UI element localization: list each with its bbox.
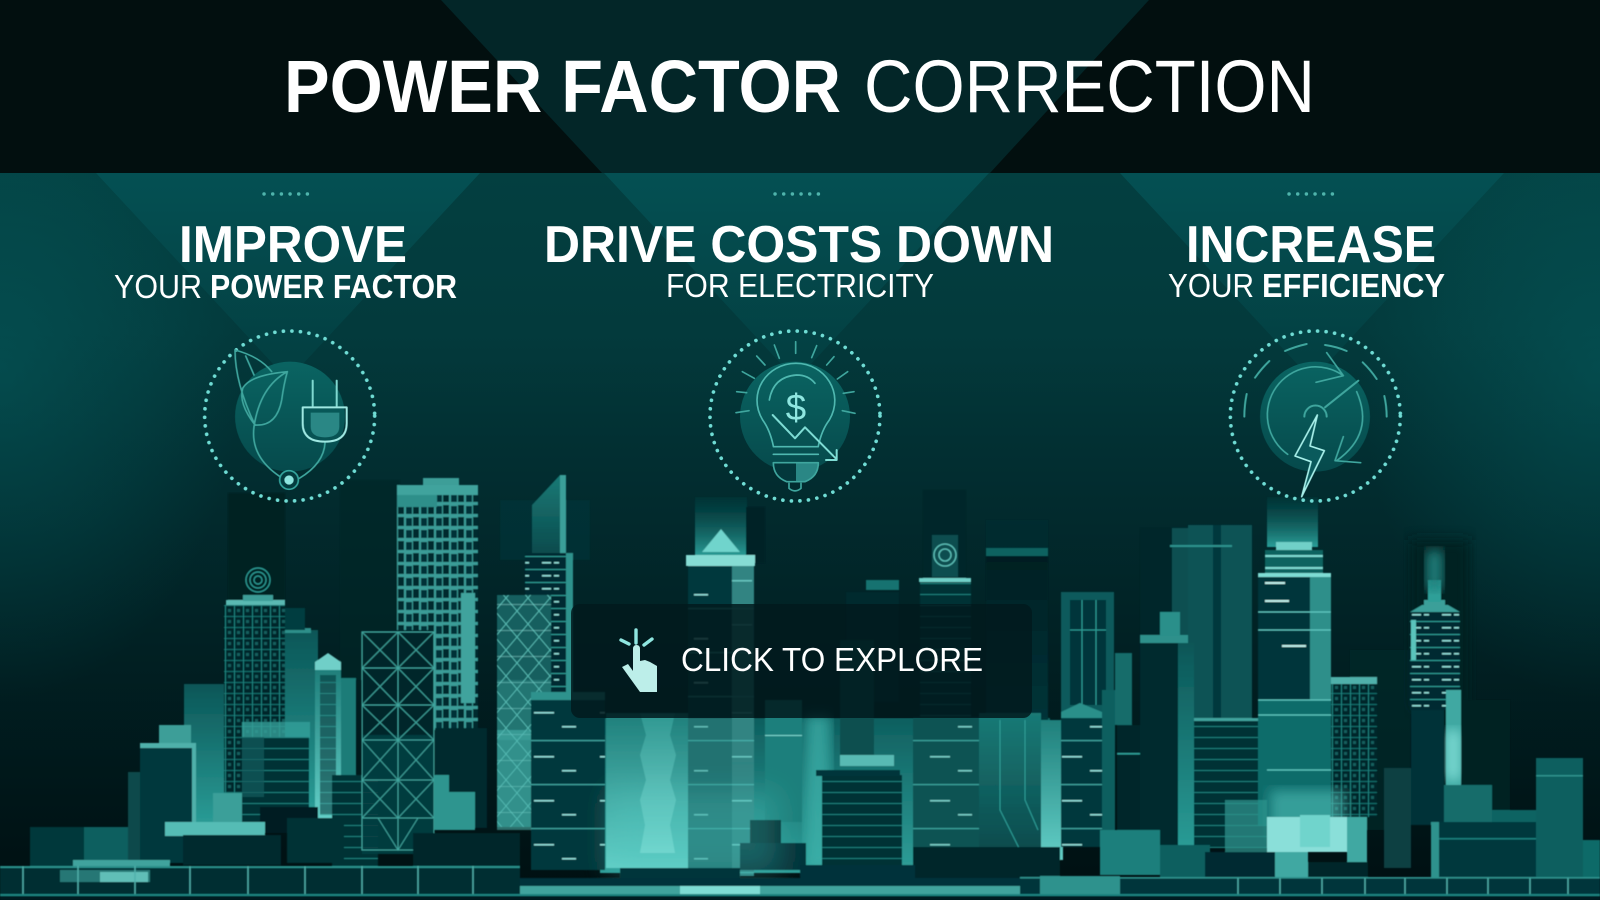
skyline (0, 475, 1600, 900)
dollar sign: $ (786, 387, 806, 428)
rays (736, 342, 855, 413)
skyline: left district (30, 568, 378, 867)
back leaf (235, 350, 272, 425)
column 2 heading: FOR ELECTRICITY (666, 267, 934, 304)
title: CORRECTION (864, 45, 1315, 128)
skyline: tall right tower (1225, 497, 1377, 877)
rotation arrows (1267, 353, 1363, 463)
front leaf (242, 372, 287, 427)
button label: CLICK TO EXPLORE (681, 641, 983, 678)
column 1 heading: POWER FACTOR (210, 268, 457, 305)
central tower glow (695, 497, 747, 557)
skyline: foreground dark blocks and rail (0, 845, 1600, 900)
cord (254, 427, 325, 478)
skyline: bottom glow (610, 790, 780, 875)
column 3 heading: EFFICIENCY (1262, 267, 1445, 304)
down arrow (773, 415, 837, 460)
column 3 heading: INCREASE (1186, 216, 1436, 274)
connector node (280, 471, 298, 489)
crown emblem (246, 568, 270, 592)
bulb base (773, 463, 818, 491)
skyline: crown tower (913, 490, 1063, 860)
skyline: central district (531, 497, 902, 876)
icon: leaf and plug (205, 331, 375, 501)
icon: tapping hand (621, 630, 657, 692)
needle (1304, 381, 1358, 417)
panel: header band (0, 0, 1600, 173)
column 3 heading: YOUR (1168, 267, 1254, 304)
column 1 heading (114, 194, 457, 305)
glowing base (1270, 790, 1345, 840)
glass tower with mirror facade (532, 475, 566, 555)
skyline: dark shadows behind towers (228, 480, 1510, 873)
skyline: mid-left towers (413, 475, 573, 880)
background: right edge glow (1360, 40, 1600, 700)
tower with grid windows (224, 605, 285, 795)
central tower roof (702, 529, 740, 552)
column 1 heading: IMPROVE (179, 216, 407, 274)
outer dashes (1244, 344, 1387, 417)
column 2 heading (544, 194, 1054, 304)
column 1 heading: YOUR (114, 268, 202, 305)
background: left edge glow (0, 40, 240, 700)
call to action button (571, 604, 1032, 718)
skyline: lattice tower (362, 630, 434, 854)
bulb (757, 363, 835, 454)
skyline: far right towers (1384, 550, 1600, 877)
column 2 heading: DRIVE COSTS DOWN (544, 216, 1054, 274)
skyline: right-center towers (1061, 525, 1267, 875)
title: POWER FACTOR (284, 45, 841, 128)
diamond facade tower (497, 595, 551, 827)
icon: light bulb with dollar (710, 331, 880, 501)
low-rise behind panel (846, 592, 899, 702)
column 3 heading (1168, 194, 1445, 304)
icon: efficiency gauge with bolt (1230, 331, 1400, 501)
light cones under header (96, 173, 1504, 380)
skyline: glass tower (397, 478, 478, 730)
plug (303, 381, 347, 442)
lightning bolt (1295, 415, 1324, 497)
title (284, 45, 1315, 128)
